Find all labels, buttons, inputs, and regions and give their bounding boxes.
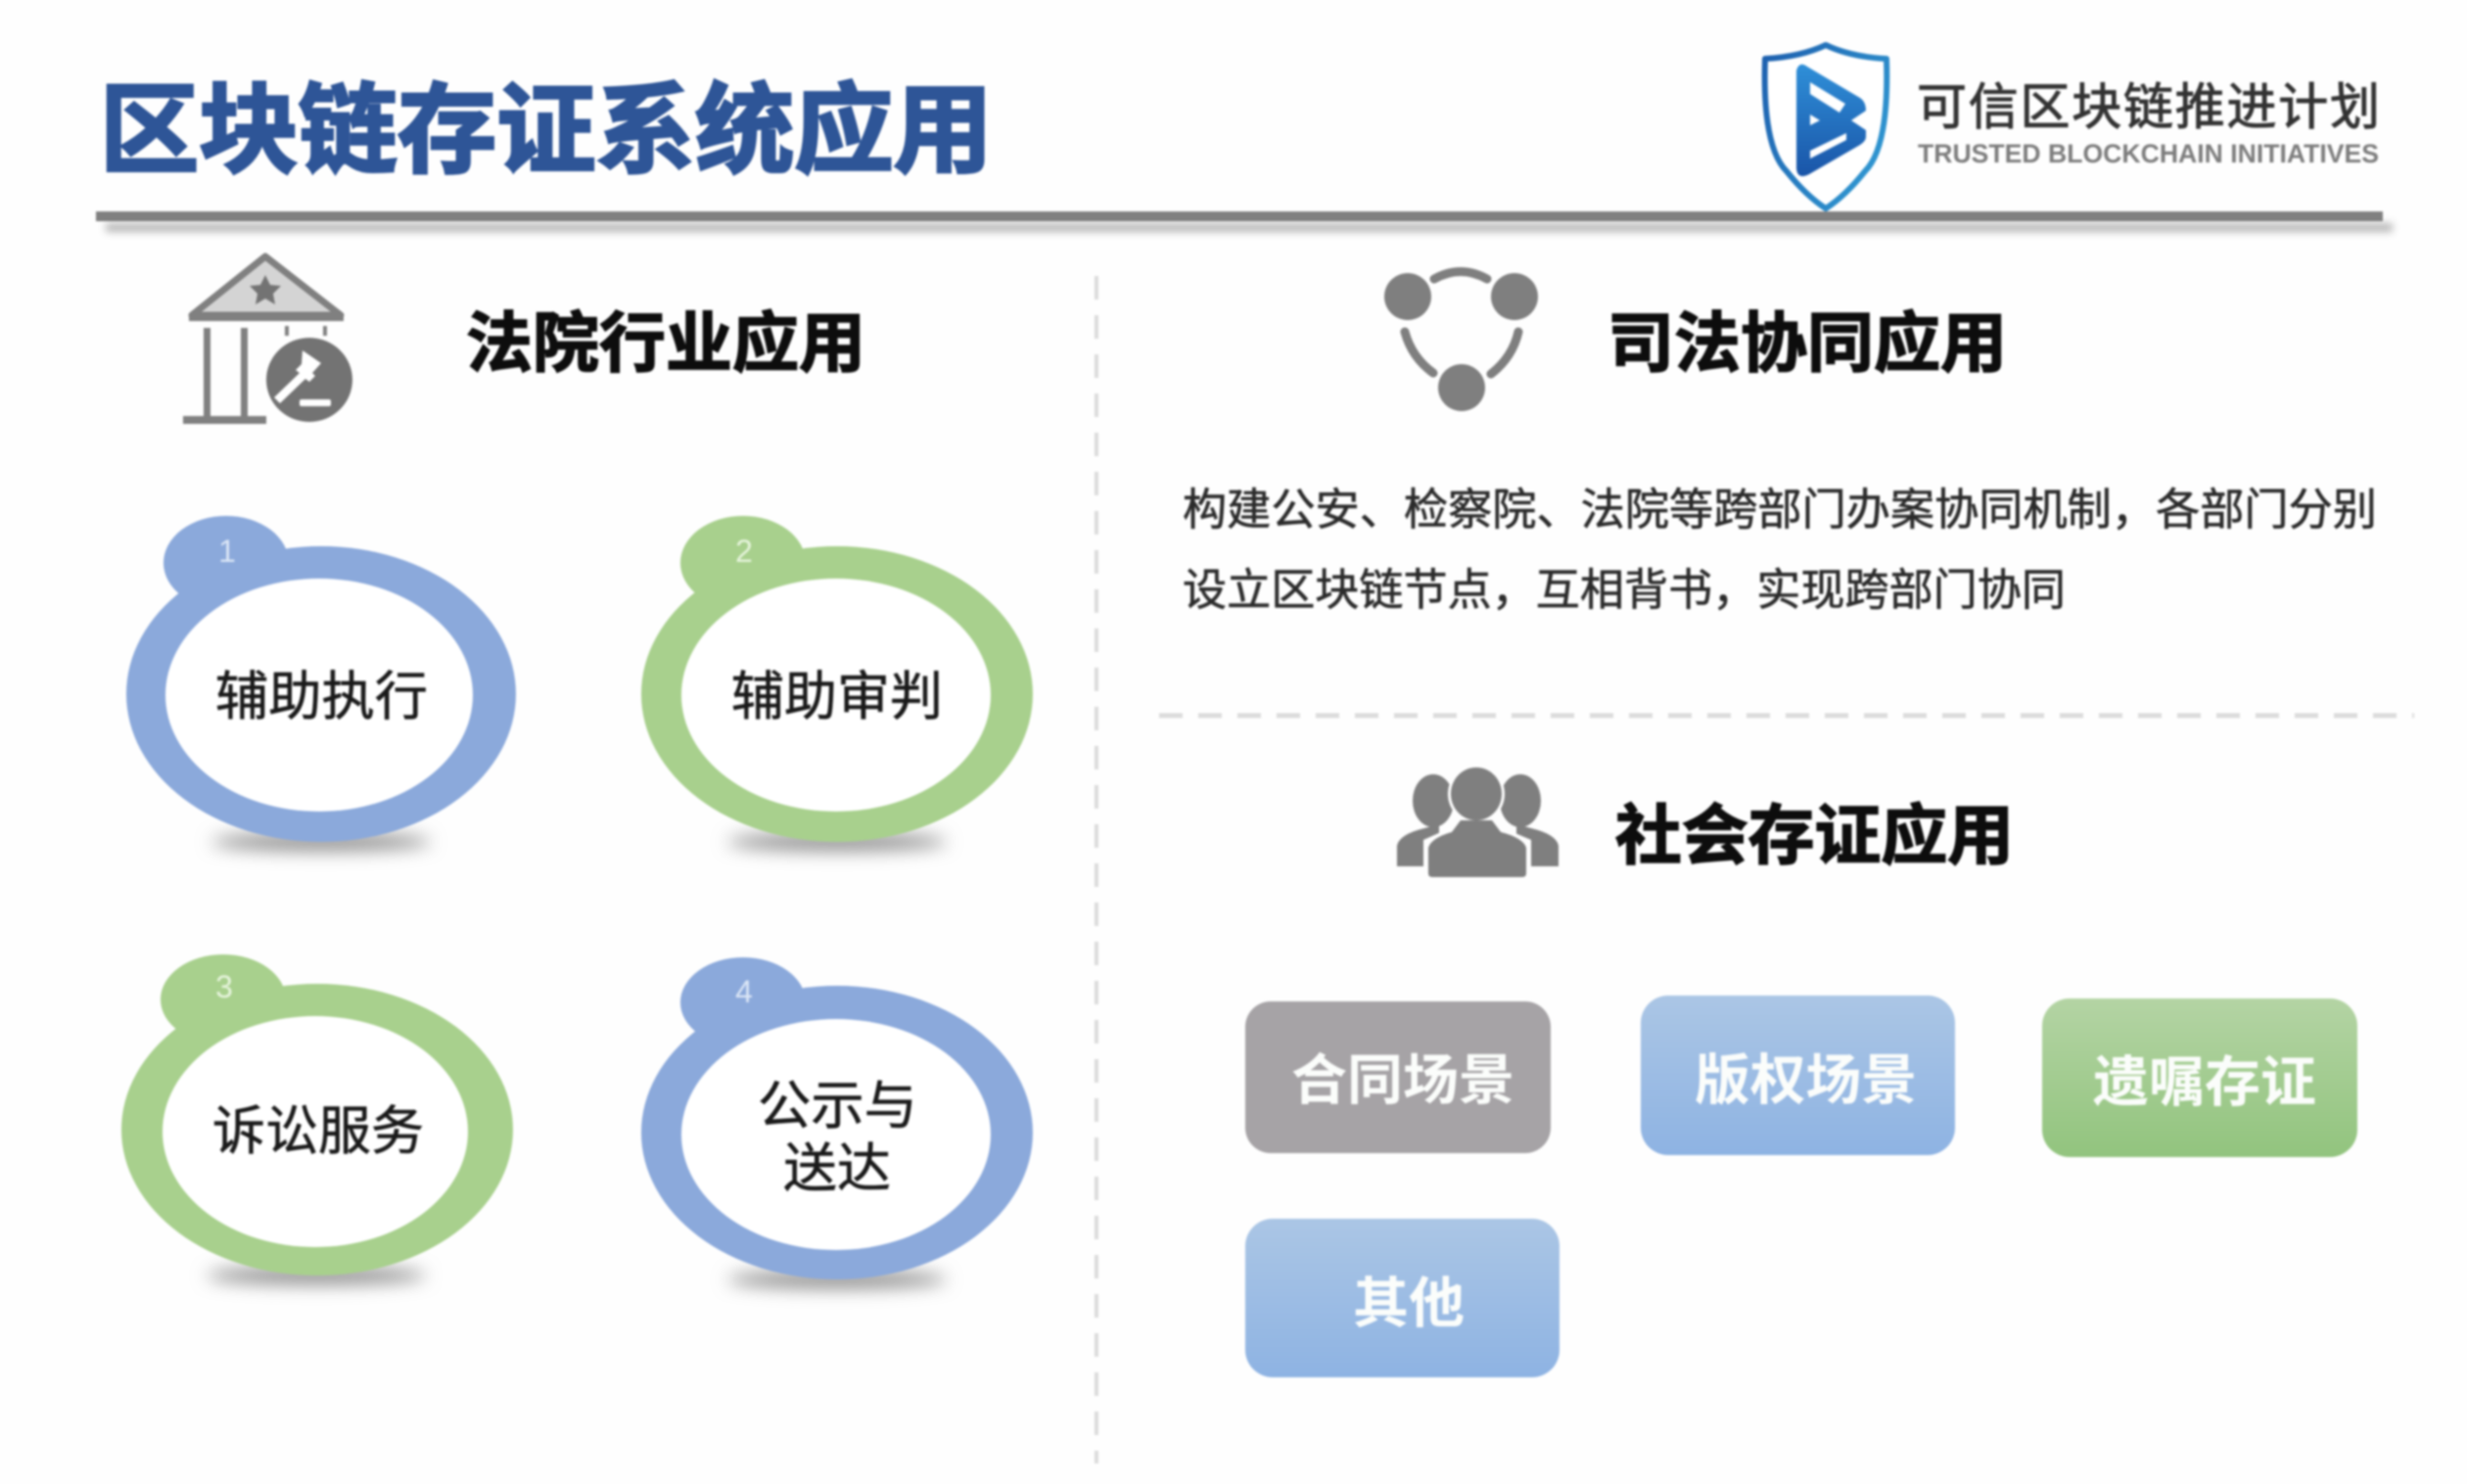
box: copyright bbox=[1641, 996, 1955, 1155]
panel: judicial collaboration bbox=[1183, 272, 2377, 615]
heading: judicial: 司法协同应用 bbox=[1607, 307, 2007, 381]
ring 4: 送达 bbox=[783, 1139, 891, 1198]
ring 3: 3 bbox=[215, 969, 233, 1004]
panel: social evidence bbox=[1245, 765, 2357, 1377]
box: contract: 合同场景 bbox=[1291, 1049, 1514, 1111]
box: will: 遗嘱存证 bbox=[2093, 1051, 2316, 1113]
ring 4: 4 bbox=[735, 974, 753, 1009]
ring 3: 诉讼服务 bbox=[212, 1102, 424, 1161]
ring 4 bbox=[641, 957, 1033, 1288]
icon: courthouse and gavel bbox=[183, 256, 352, 424]
description text: 构建公安、检察院、法院等跨部门办案协同机制，各部门分别 bbox=[1183, 485, 2377, 534]
box: copyright: 版权场景 bbox=[1695, 1049, 1917, 1111]
icon: shield with B bbox=[1765, 45, 1886, 209]
panel: court applications bbox=[121, 256, 1033, 1288]
logo: Trusted Blockchain Initiatives bbox=[1765, 45, 2380, 209]
ring 1: 1 bbox=[218, 533, 236, 569]
icon: group of people bbox=[1397, 765, 1559, 881]
heading: court: 法院行业应用 bbox=[466, 307, 865, 381]
logo English name: TRUSTED BLOCKCHAIN INITIATIVES bbox=[1918, 139, 2379, 168]
description text: 设立区块链节点，互相背书，实现跨部门协同 bbox=[1183, 565, 2066, 615]
heading: social: 社会存证应用 bbox=[1615, 800, 2014, 873]
ring 1: 辅助执行 bbox=[215, 668, 428, 726]
box: other: 其他 bbox=[1353, 1273, 1465, 1334]
title: 区块链存证系统应用 bbox=[100, 76, 993, 186]
ring 2: 2 bbox=[735, 533, 753, 569]
ring 3 bbox=[121, 954, 513, 1284]
box: will bbox=[2042, 998, 2357, 1157]
ring 2: 辅助审判 bbox=[731, 668, 943, 726]
description text bbox=[1183, 485, 2377, 615]
ring 1 bbox=[126, 516, 516, 851]
logo Chinese name: 可信区块链推进计划 bbox=[1917, 79, 2380, 135]
box: contract bbox=[1245, 1001, 1551, 1153]
ring 2 bbox=[641, 516, 1033, 851]
icon: network of three nodes bbox=[1384, 272, 1538, 411]
box: other bbox=[1245, 1219, 1559, 1377]
ring 4: 公示与 bbox=[758, 1077, 917, 1136]
header rule bbox=[96, 211, 2393, 232]
